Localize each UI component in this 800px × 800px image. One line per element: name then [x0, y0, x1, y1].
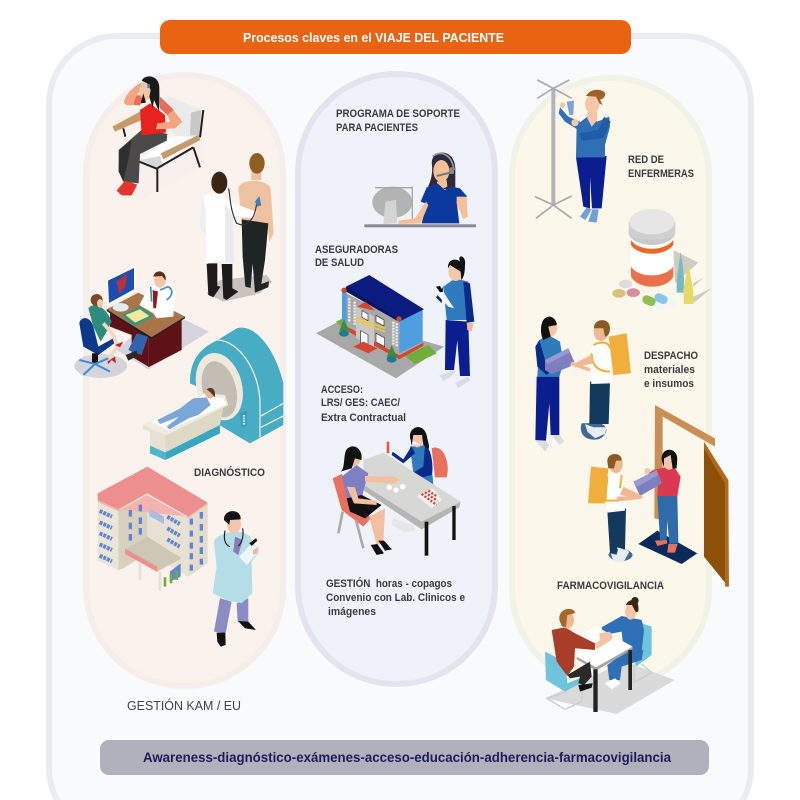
GESTION horas label: Convenio con Lab. Clinicos e	[326, 592, 465, 604]
panel: logistics capsule	[512, 78, 709, 687]
ACCESO label	[321, 384, 406, 424]
RED DE ENFERMERAS label: RED DE	[628, 154, 664, 166]
RED DE ENFERMERAS label: ENFERMERAS	[628, 168, 694, 180]
DESPACHO label	[644, 350, 698, 390]
left visitor	[545, 609, 612, 709]
bottom journey bar	[100, 740, 709, 775]
illustration: nurse with IV pole	[535, 80, 611, 223]
courier	[570, 320, 631, 440]
bottom journey bar: Awareness-diagnóstico-exámenes-acceso-educación-adherencia-farmacovigilancia	[143, 750, 671, 765]
nurse	[535, 317, 574, 452]
DESPACHO label: e insumos	[644, 378, 694, 390]
illustration: insurance building	[316, 275, 444, 378]
DESPACHO label: DESPACHO	[644, 350, 698, 362]
GESTION horas label: imágenes	[328, 606, 376, 618]
GESTION horas label	[326, 577, 465, 618]
ASEGURADORAS label	[315, 244, 398, 269]
illustration: blood test at table	[333, 427, 461, 556]
right patient	[602, 597, 652, 689]
lab nurse	[387, 427, 448, 533]
PROGRAMA label: PARA PACIENTES	[336, 122, 418, 134]
door	[654, 405, 729, 587]
illustration: doctor with tablet	[213, 511, 259, 647]
GESTION KAM label: GESTIÓN KAM / EU	[127, 698, 241, 713]
patient bed	[143, 393, 228, 460]
table	[577, 627, 633, 712]
title bar: Procesos claves en el VIAJE DEL PACIENTE	[243, 30, 504, 45]
table	[363, 453, 461, 556]
ACCESO label: ACCESO:	[321, 384, 363, 396]
illustration: pill bottle and ampoules	[612, 209, 712, 306]
panel: support capsule	[298, 74, 495, 684]
ASEGURADORAS label: ASEGURADORAS	[315, 244, 398, 256]
IV pole	[535, 80, 572, 218]
illustration: doctor examining patient	[199, 153, 274, 302]
panel: diagnosis capsule	[86, 75, 283, 686]
title bar	[160, 20, 631, 54]
courier	[588, 454, 643, 563]
illustration: home door delivery	[588, 405, 729, 587]
seated patient	[333, 446, 399, 555]
DESPACHO label: materiales	[644, 364, 695, 376]
patient seated	[79, 294, 123, 375]
PROGRAMA label	[336, 108, 460, 134]
illustration: MRI scanner	[143, 328, 283, 460]
illustration: call center agent	[364, 152, 476, 227]
GESTION horas label: GESTIÓN horas - copagos	[326, 577, 452, 590]
patient lying	[157, 388, 215, 429]
customer	[644, 450, 681, 553]
DIAGNOSTICO label: DIAGNÓSTICO	[194, 466, 265, 479]
RED DE ENFERMERAS label	[628, 154, 694, 180]
illustration: pharmacovigilance consultation	[545, 597, 675, 714]
ACCESO label: LRS/ GES: CAEC/	[321, 397, 400, 409]
doctor seated	[126, 271, 175, 361]
illustration: nurse handing box to courier	[535, 317, 631, 452]
patient	[238, 153, 274, 293]
doctor	[199, 172, 261, 300]
PROGRAMA label: PROGRAMA DE SOPORTE	[336, 108, 460, 120]
illustration: doctor consultation at desk	[74, 266, 209, 378]
desk	[107, 293, 185, 367]
ACCESO label: Extra Contractual	[321, 412, 406, 424]
ASEGURADORAS label: DE SALUD	[315, 257, 364, 269]
monitor with heart	[107, 266, 135, 305]
illustration: woman with headache on chair	[112, 76, 203, 200]
illustration: nurse with clipboard	[436, 256, 474, 388]
illustration: hospital building	[98, 467, 208, 591]
FARMACOVIGILANCIA label: FARMACOVIGILANCIA	[557, 580, 664, 592]
